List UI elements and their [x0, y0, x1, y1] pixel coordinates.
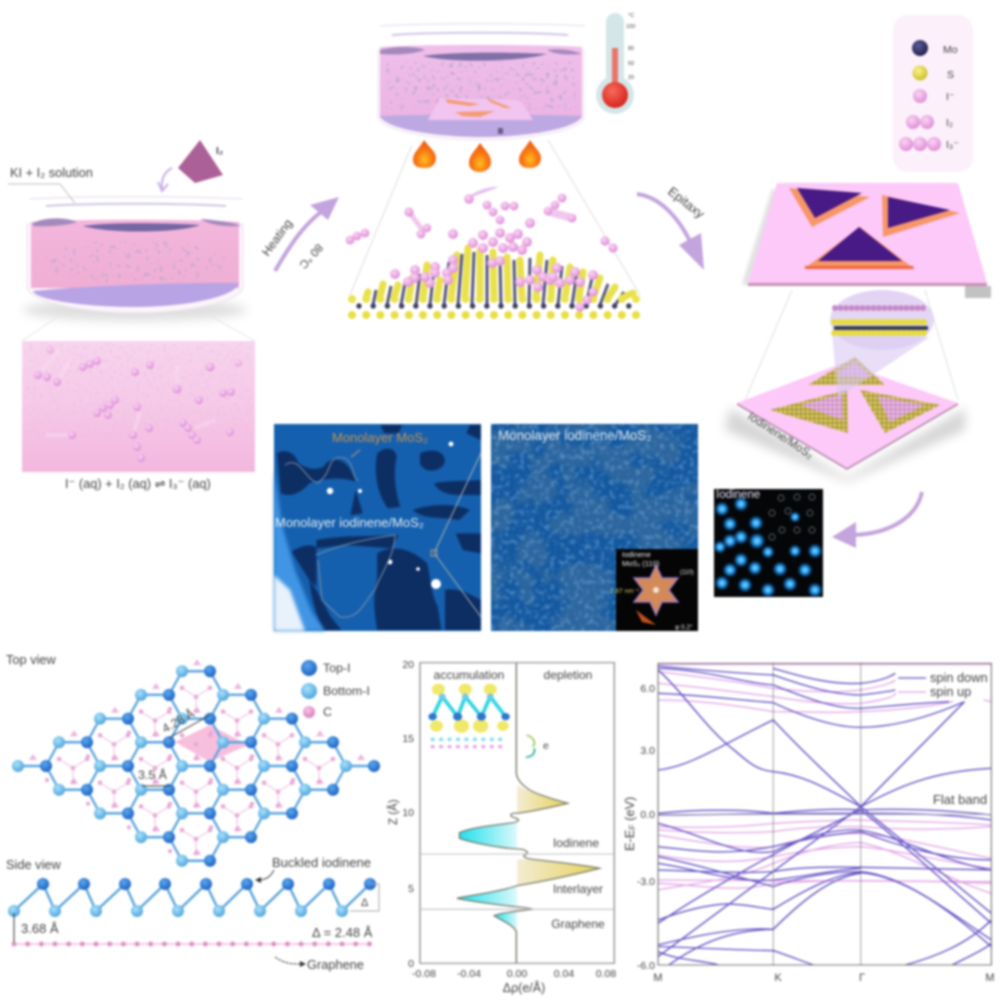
legend: atoms: I₂	[946, 117, 953, 129]
axis ticks and labels: 0.00	[507, 968, 527, 980]
FFT inset	[610, 549, 698, 631]
region labels: Graphene	[551, 917, 605, 931]
pink liquid	[31, 220, 239, 288]
electron transfer arrows	[527, 735, 534, 747]
magnifier: atomic layers	[830, 290, 934, 398]
interlayer distance	[14, 913, 59, 942]
sheet shadow	[965, 286, 991, 298]
graphene layer	[29, 659, 365, 855]
FFT inset: (110)	[680, 570, 694, 576]
axis ticks and labels: 20	[402, 659, 414, 671]
label graphene: Graphene	[307, 957, 364, 972]
y axis ticks: 6.0	[640, 683, 655, 695]
small arrow: crystal drops in	[158, 168, 172, 191]
bright substrate corner	[274, 470, 325, 631]
arrow: epitaxy: Epitaxy	[665, 184, 708, 222]
axis ticks and labels: 0.08	[596, 968, 616, 980]
purple bottom layer	[33, 283, 239, 307]
diamond substrate	[737, 363, 958, 468]
S atom rows	[352, 295, 640, 303]
y axis label: Z (Å)	[387, 799, 400, 825]
label: Iodinene	[716, 489, 760, 501]
thermometer: 100	[626, 24, 635, 30]
chart: band structure	[622, 663, 995, 984]
FFT inset: Iodinene	[622, 550, 651, 559]
layer separators	[420, 854, 614, 909]
arrow: heating: 80 °C	[296, 241, 325, 270]
beaker lid	[30, 197, 242, 199]
axis ticks and labels: 5	[408, 883, 414, 895]
thermometer: °C	[628, 13, 634, 19]
axis ticks and labels: -0.04	[457, 968, 481, 980]
buckling height: Δ	[361, 897, 369, 909]
FFT inset: MoS₂ (110)	[622, 559, 660, 568]
profile curve	[457, 663, 600, 963]
label buckled iodinene	[255, 855, 371, 883]
beaker shadow	[23, 299, 247, 321]
flat band label: Flat band	[933, 792, 987, 807]
band legend: spin down	[930, 670, 988, 685]
axis ticks and labels: 0.04	[554, 968, 574, 980]
region labels: Interlayer	[553, 882, 603, 896]
k-path labels: K	[774, 972, 782, 984]
center purple bottom	[380, 114, 582, 137]
top view lattice	[12, 659, 380, 867]
band legend: spin up	[930, 684, 971, 699]
dissolved iodine specks	[46, 240, 226, 284]
MoS2 pyramid with iodine clusters	[352, 228, 640, 315]
iodine bonds	[18, 671, 374, 861]
zoom guide lines, left	[22, 313, 255, 341]
spin up bands	[658, 664, 991, 893]
band axes frame	[658, 663, 991, 965]
center liquid	[380, 45, 582, 118]
FFT inset: 2.87 nm⁻¹	[610, 588, 640, 595]
sheet	[748, 183, 987, 283]
center dissolved specks	[386, 62, 576, 110]
beaker rim	[27, 224, 243, 313]
liquid surface band	[33, 218, 241, 232]
side view structure	[8, 855, 379, 972]
heading: top view: Top view	[6, 652, 57, 667]
bond length 3.5	[138, 767, 170, 786]
bright particles	[327, 442, 453, 589]
grey atom markers	[769, 494, 815, 540]
y axis label: E-E	[622, 830, 637, 851]
k-path labels: M	[653, 972, 663, 984]
legend: atoms: Mo	[943, 44, 958, 56]
y axis label: (eV)	[622, 797, 637, 824]
arrow to atomic image	[832, 492, 922, 548]
y axis ticks: 0.0	[640, 809, 655, 821]
label buckled iodinene: Buckled iodinene	[272, 855, 371, 870]
axis ticks and labels: -0.08	[412, 968, 436, 980]
flake 3	[805, 227, 913, 268]
band legend	[898, 666, 988, 699]
thermometer	[596, 13, 635, 114]
label MoS2: Monolayer MoS₂	[332, 430, 428, 445]
iodine atoms	[12, 665, 380, 867]
iodinene overlay on triangles	[800, 394, 843, 420]
atomic resolution image	[713, 489, 823, 598]
region labels: depletion	[544, 668, 592, 682]
legend: atoms: S	[947, 69, 954, 81]
axis ticks and labels: 10	[402, 807, 414, 819]
axis ticks and labels: 0	[408, 958, 414, 970]
y axis ticks	[637, 683, 655, 972]
bright atomic spots	[713, 496, 823, 598]
spin down bands	[658, 666, 991, 967]
domain outlines	[285, 458, 395, 617]
inset charge density model	[428, 684, 535, 757]
small arrow above molecules	[468, 187, 497, 198]
equilibrium equation: I⁻ (aq) + I₂ (aq) ⇌ I₃⁻ (aq)	[65, 476, 211, 491]
axis ticks and labels: 15	[402, 733, 414, 745]
buckling height: Δ = 2.48 Å	[312, 925, 373, 940]
zoom guide lines, center	[350, 140, 640, 295]
solution label	[8, 165, 93, 203]
STEM image: monolayer MoS2 and iodinene	[274, 424, 481, 631]
thermometer: 50	[628, 61, 634, 67]
region labels	[434, 668, 605, 931]
FFT inset: φ 0.2°	[675, 623, 693, 631]
lid	[380, 24, 585, 26]
y axis label: F	[627, 824, 637, 830]
legend: atoms	[893, 15, 973, 172]
region labels: e	[543, 740, 549, 752]
MoS2 substrate with flakes	[428, 98, 533, 120]
fermi level	[658, 814, 992, 816]
interlayer distance: 3.68 Å	[21, 921, 59, 936]
top iodine atoms	[37, 878, 376, 890]
panel: solution close-up	[22, 341, 255, 472]
axis ticks and labels	[402, 659, 616, 980]
thermometer: 20	[628, 75, 634, 81]
zoom guide lines, right	[745, 290, 958, 400]
legend: top view atoms: Bottom-I	[323, 684, 370, 698]
pink unit cell	[175, 725, 248, 762]
flake 2	[882, 195, 960, 237]
gold triangles	[770, 390, 848, 433]
STEM image: iodinene high magnification	[491, 424, 698, 631]
buckled bonds	[14, 884, 370, 911]
iodine crystal: I₂	[216, 146, 223, 157]
filled lobes	[457, 785, 600, 930]
flake 1	[789, 188, 870, 227]
k-path labels	[653, 972, 995, 984]
label graphene	[275, 957, 364, 972]
k-path labels: M	[985, 972, 995, 984]
iodine crystal	[178, 140, 223, 183]
center surface band	[380, 47, 582, 61]
y axis ticks: -6.0	[637, 960, 655, 972]
heading: side view: Side view	[6, 857, 62, 872]
lattice constant 4.28	[159, 706, 210, 738]
top sheet with triangular flakes	[745, 183, 991, 298]
dark MoS2 domains	[277, 425, 481, 630]
label iodinene: Monolayer iodinene/MoS₂	[275, 515, 424, 530]
y axis ticks: -3.0	[637, 876, 655, 888]
left beaker: KI and I2 solution	[23, 197, 247, 321]
buckling height	[312, 884, 379, 940]
thermometer: 80	[628, 46, 634, 52]
band lines	[658, 664, 991, 967]
center beaker: heated	[378, 24, 585, 140]
arrow: heating	[259, 197, 339, 271]
lower sheet: iodinene on MoS2	[725, 357, 965, 482]
legend: top view atoms	[301, 660, 370, 719]
y axis ticks: 3.0	[640, 745, 655, 757]
bond length 3.5: 3.5 Å	[138, 767, 168, 782]
region labels: accumulation	[434, 668, 504, 682]
legend: atoms: I⁻	[946, 91, 955, 103]
symmetry lines and fermi level	[773, 663, 861, 965]
center beaker rim	[378, 50, 584, 140]
k-path labels: Γ	[859, 972, 865, 984]
lattice constant 4.28: 4.28 Å	[159, 706, 197, 736]
legend: top view atoms: C	[323, 705, 332, 719]
substrate label: Iodinene/MoS₂	[745, 410, 815, 462]
flames	[413, 140, 541, 172]
arrow: epitaxy	[637, 184, 708, 270]
solution label: KI + I₂ solution	[10, 165, 93, 180]
label: Monolayer iodinene/MoS₂	[498, 428, 651, 443]
axes frame	[420, 663, 614, 963]
legend: top view atoms: Top-I	[323, 661, 351, 675]
pink iodine clusters	[390, 228, 598, 312]
free iodine molecules	[346, 194, 618, 253]
x axis label: Δρ(e/Å)	[503, 980, 545, 995]
legend: atoms: I₃⁻	[946, 139, 959, 151]
Mo atoms	[359, 252, 640, 306]
arrow: heating: Heating	[259, 217, 295, 259]
S atom columns	[366, 248, 633, 298]
graphene row	[14, 943, 372, 945]
bottom iodine atoms	[8, 905, 348, 917]
region labels: Iodinene	[553, 836, 599, 850]
callout lines	[434, 453, 481, 617]
lower sheet shadow	[725, 408, 965, 482]
chart: charge density difference	[387, 659, 616, 995]
